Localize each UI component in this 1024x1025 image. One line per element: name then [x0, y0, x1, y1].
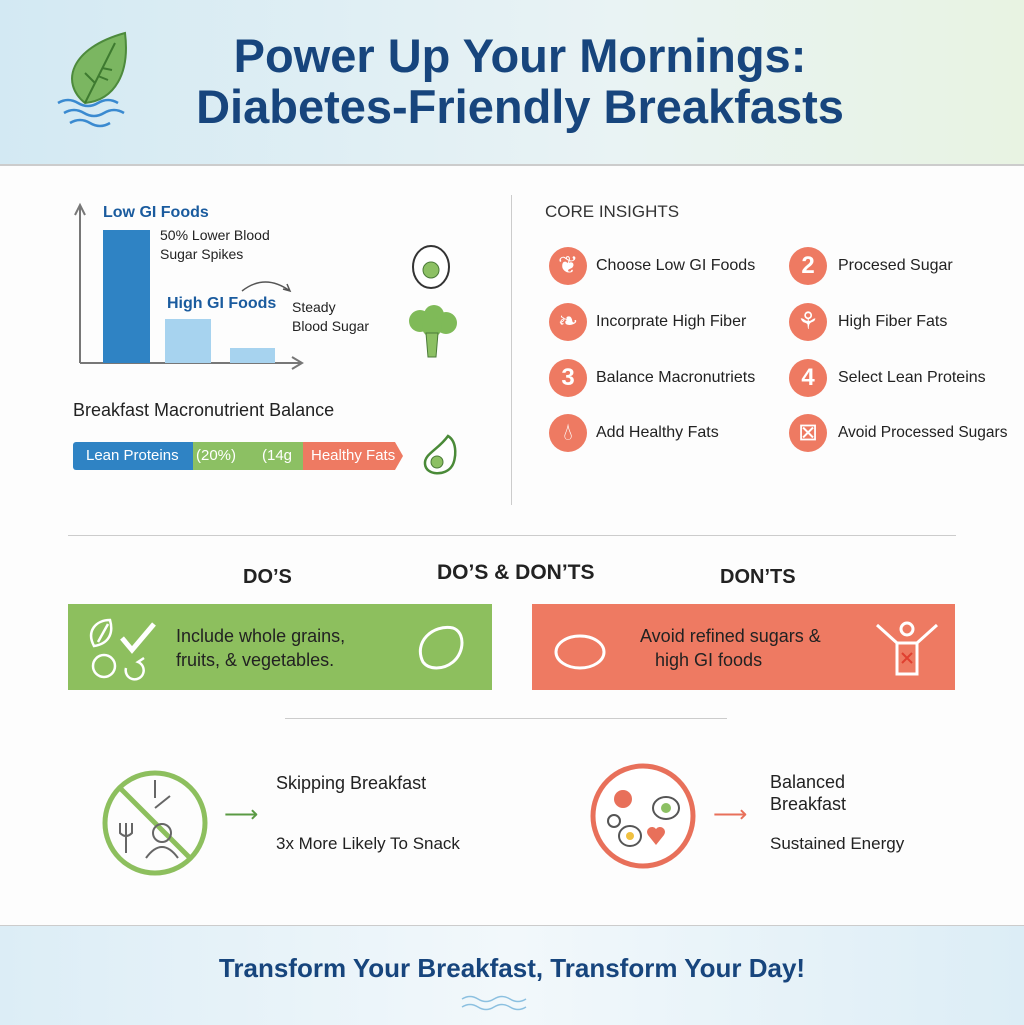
icon: egg [412, 245, 450, 289]
panel: core insights: 💧︎ [563, 419, 573, 446]
panel: core insights: ❦ [558, 252, 578, 279]
text: balanced breakfast: Balanced [770, 772, 845, 792]
text: balanced breakfast: Breakfast [770, 794, 846, 814]
panel: core insights: Choose Low GI Foods [596, 257, 755, 274]
title: Diabetes-Friendly Breakfasts [196, 80, 844, 133]
text: skipping breakfast: Skipping Breakfast [276, 773, 426, 793]
text: Sustained Energy [770, 834, 904, 853]
macronutrient bar [73, 442, 403, 470]
panel: do's box: fruits, & vegetables. [176, 650, 334, 670]
panel: don'ts box: high GI foods [655, 650, 762, 670]
icon: balanced plate [590, 764, 696, 868]
panel: GI chart: 50% Lower Blood [160, 227, 270, 243]
icon: broccoli [409, 305, 457, 358]
icon: no eating [102, 770, 208, 876]
panel: GI chart: Steady [292, 299, 336, 315]
panel: GI chart [74, 202, 369, 370]
panel: do's box: Include whole grains, [176, 626, 345, 646]
icon: avocado [424, 434, 456, 474]
panel: core insights [545, 202, 1007, 452]
panel: core insights: Procesed Sugar [838, 257, 953, 274]
text: balanced breakfast [770, 772, 846, 814]
macronutrient bar: (20%) [196, 447, 236, 464]
panel: core insights: ⊠ [798, 419, 818, 446]
panel: don'ts box [532, 604, 955, 690]
panel: core insights: 4 [801, 364, 815, 391]
text: 3x More Likely To Snack [276, 834, 460, 853]
panel: core insights: ❧ [558, 308, 578, 335]
panel: core insights: Avoid Processed Sugars [838, 424, 1007, 441]
title: Power Up Your Mornings: [234, 29, 806, 82]
arrow: red: ⟶ [713, 801, 747, 828]
icon: leaf with water [57, 32, 127, 128]
macronutrient bar: (14g [262, 447, 292, 464]
panel: core insights: Balance Macronutriets [596, 369, 755, 386]
title [196, 29, 844, 133]
panel: core insights: 2 [801, 252, 815, 279]
footer band [0, 925, 1024, 1025]
panel: don'ts box: Avoid refined sugars & [640, 626, 821, 646]
panel: core insights: Incorprate High Fiber [596, 313, 746, 330]
panel: core insights: ⚘ [797, 308, 819, 335]
heading: macronutrient: Breakfast Macronutrient Balance [73, 400, 334, 420]
header band [0, 0, 1024, 165]
macronutrient bar: Healthy Fats [311, 447, 395, 464]
panel: do's box [68, 604, 492, 690]
panel: GI chart: Low GI Foods [103, 204, 209, 221]
panel: GI chart: High GI Foods [167, 295, 276, 312]
panel: core insights: Select Lean Proteins [838, 369, 986, 386]
panel: core insights: Add Healthy Fats [596, 424, 719, 441]
macronutrient bar: Lean Proteins [86, 447, 179, 464]
panel: core insights: High Fiber Fats [838, 313, 947, 330]
arrow: green: ⟶ [224, 801, 258, 828]
panel: GI chart: Sugar Spikes [160, 246, 243, 262]
panel: GI chart: Blood Sugar [292, 318, 369, 334]
heading: do's & don'ts: DO’S & DON’TS [437, 561, 595, 584]
footer band: Transform Your Breakfast, Transform Your Day! [219, 953, 805, 983]
heading: do's: DO’S [243, 566, 292, 588]
heading: don'ts: DON’TS [720, 566, 796, 588]
panel: core insights: 3 [561, 364, 575, 391]
panel: core insights: CORE INSIGHTS [545, 202, 679, 221]
